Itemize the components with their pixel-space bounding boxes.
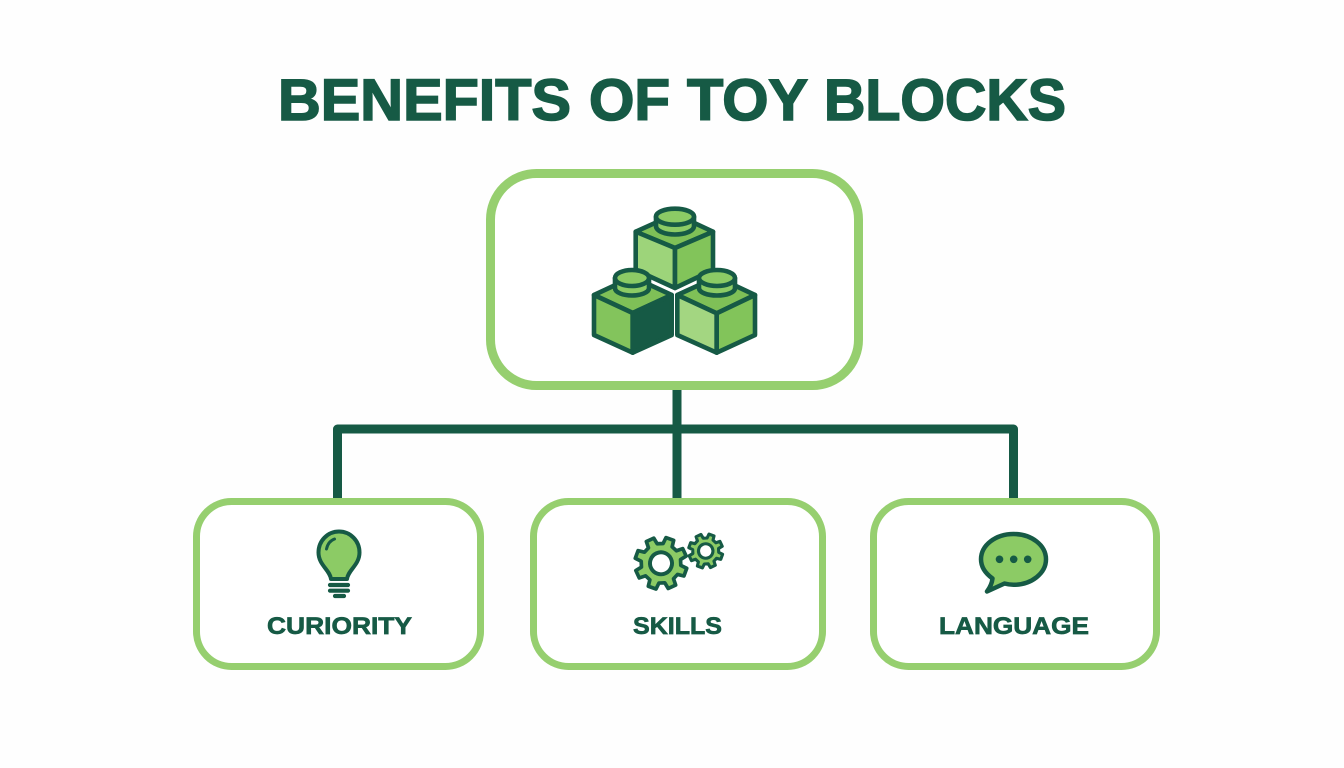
left block [594,270,672,353]
label: skills: SKILLS [633,613,722,640]
icon: light bulb [318,532,360,596]
title: OF [589,68,670,133]
top block [636,209,713,288]
title: BENEFITS [278,68,571,133]
title: BLOCKS [824,68,1066,133]
panel: curiority [196,502,480,666]
right block [677,270,755,353]
panel: skills [534,502,822,666]
small gear [684,529,727,573]
title: TOY [687,68,807,133]
large gear [628,530,694,596]
label: curiority: CURIORITY [267,613,412,640]
icon: toy blocks [594,209,755,353]
connector lines [338,388,1014,500]
icon: speech bubble [981,534,1046,592]
label: language: LANGUAGE [939,613,1089,640]
panel: language [874,502,1156,666]
icon: gears [628,529,727,596]
panel: toy blocks [490,174,858,386]
